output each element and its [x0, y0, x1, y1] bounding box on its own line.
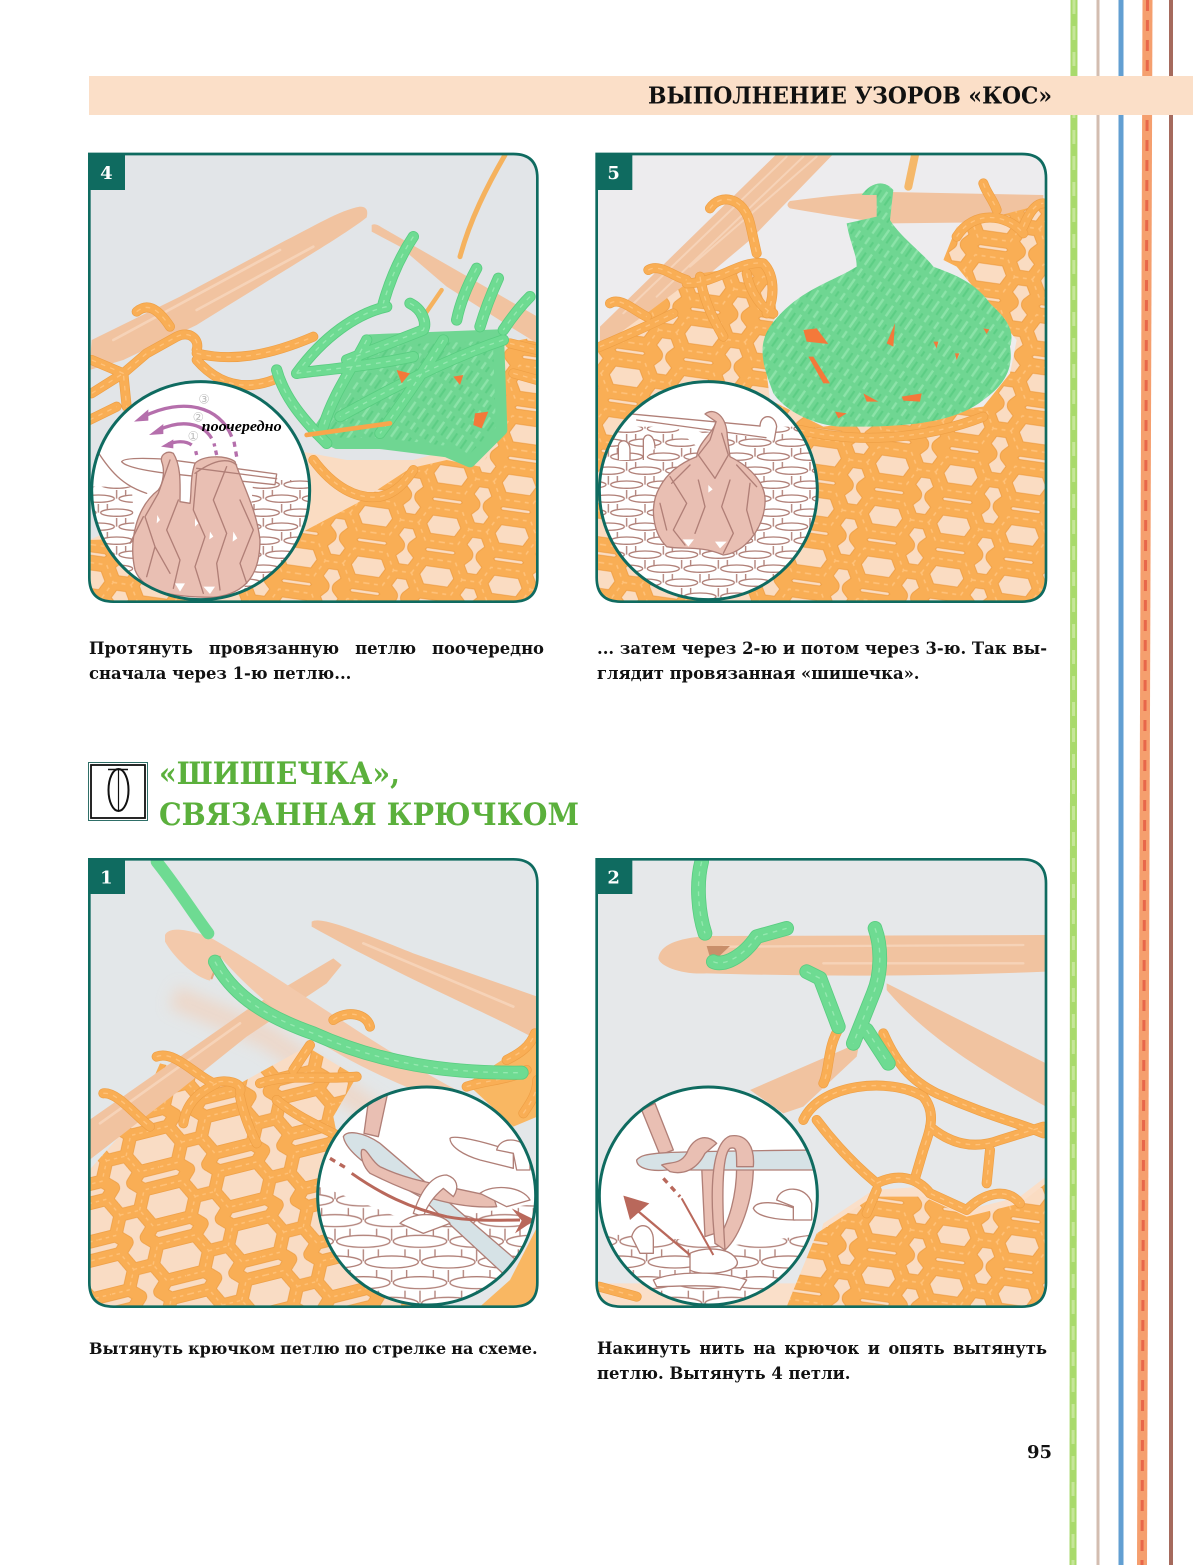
photo: step 1 [89, 859, 537, 1307]
header band [89, 76, 1193, 115]
caption: step 2 text [597, 1339, 1047, 1383]
caption: step 5 text: глядит провязанная «шишечка». [597, 664, 920, 683]
badge: 2: 2 [607, 868, 620, 889]
panel: step 1 [89, 859, 537, 1310]
inset diagram: step 4: ② [193, 410, 204, 425]
badge: 2 [597, 859, 632, 894]
inset diagram: step 5 [597, 382, 823, 603]
page number: 95 [1027, 1442, 1052, 1463]
inset diagram: step 4: поочередно [202, 419, 282, 435]
panel: step 4 [89, 154, 537, 602]
caption: step 4 text: Протянуть провязанную петлю поочередно [89, 639, 544, 658]
badge: 4: 4 [100, 163, 113, 184]
caption: step 1 text: Вытянуть крючком петлю по стрелке на схеме. [89, 1339, 538, 1358]
inset diagram: step 1 [313, 1087, 537, 1310]
badge: 4 [89, 154, 125, 190]
panel: step 5 [597, 154, 1046, 603]
arrow [663, 1178, 680, 1197]
photo: step 5 [597, 154, 1046, 602]
section heading: «ШИШЕЧКА», [159, 756, 400, 792]
caption: step 2 text: петлю. Вытянуть 4 петли. [597, 1364, 850, 1383]
decorative yarn threads [1073, 0, 1171, 1565]
header title: ВЫПОЛНЕНИЕ УЗОРОВ «КОС» [648, 82, 1052, 110]
badge: 5 [597, 154, 632, 190]
inset diagram: step 2 [597, 1087, 820, 1310]
bobble stitches [133, 452, 260, 597]
badge: 1: 1 [100, 868, 113, 889]
caption: step 2 text: Накинуть нить на крючок и опять вытянуть [597, 1339, 1047, 1358]
badge: 5: 5 [607, 163, 620, 184]
section heading: СВЯЗАННАЯ КРЮЧКОМ [159, 797, 579, 833]
panel: step 2 [597, 859, 1046, 1310]
caption: step 4 text [89, 639, 544, 683]
badge: 1 [89, 859, 125, 894]
photo: step 2 [597, 859, 1046, 1307]
caption: step 5 text [597, 639, 1047, 683]
inset diagram: step 4: ③ [198, 391, 210, 406]
bobble stitches [653, 412, 765, 555]
arrows [143, 406, 237, 457]
inset diagram: step 4 [92, 382, 313, 602]
section icon: bobble symbol [88, 762, 148, 820]
photo: step 4 [89, 154, 537, 602]
caption: step 4 text: сначала через 1-ю петлю... [89, 664, 351, 683]
section heading [159, 756, 579, 833]
caption: step 5 text: ... затем через 2-ю и потом через 3-ю. Так вы- [597, 639, 1047, 658]
inset diagram: step 4: ① [188, 429, 199, 444]
arrow [330, 1158, 347, 1168]
